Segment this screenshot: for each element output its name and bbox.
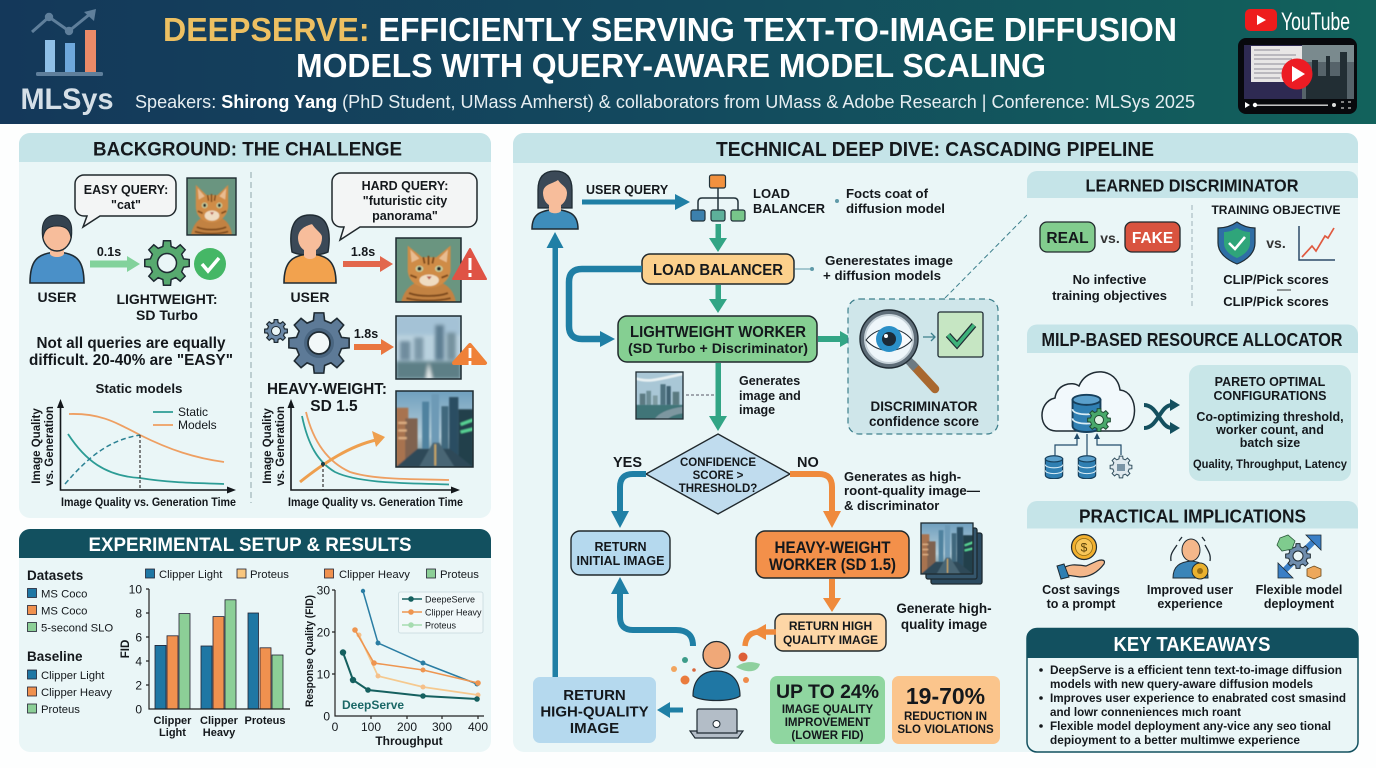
- bar chart: FID: Clipper: [154, 715, 192, 727]
- annotation: facts: Focts coat of: [846, 186, 929, 201]
- speech bubble: hard query: "futuristic city: [363, 194, 447, 208]
- label: cost savings: [1042, 583, 1120, 611]
- icon: check: [194, 248, 226, 280]
- annotation: generates image and image: image and: [739, 389, 801, 403]
- box: return high-quality image: HIGH-QUALITY: [540, 704, 649, 720]
- bar chart: FID: 4: [135, 654, 142, 668]
- annotation: generates image: + diffusion models: [823, 268, 941, 283]
- line chart: response quality vs throughput: 0: [323, 710, 330, 724]
- legend: datasets and baseline: 5-second SLO: [41, 622, 113, 634]
- training objective: TRAINING OBJECTIVE: [1212, 203, 1340, 217]
- arrow: user to return initial: [611, 577, 693, 646]
- icon: load balancer tree: [691, 175, 745, 221]
- bar chart: FID: FID: [120, 640, 132, 658]
- box: return high quality image: QUALITY IMAGE: [783, 633, 878, 647]
- line chart: response quality vs throughput: Proteus: [425, 620, 457, 630]
- chart: static models: Image Quality: [31, 408, 43, 484]
- image: cat: [187, 178, 236, 235]
- title: [163, 11, 1177, 84]
- speech bubble: hard query: panorama": [372, 209, 438, 223]
- label: cost savings: to a prompt: [1047, 597, 1116, 611]
- takeaway bullets: and lowr conneniences mıch roant: [1050, 707, 1241, 719]
- arrow: balancer to worker: [709, 285, 727, 313]
- video thumbnail: [1238, 38, 1357, 114]
- annotation: facts: [835, 186, 945, 216]
- annotation: generate high-quality: [896, 601, 992, 632]
- bar chart: FID: 6: [135, 630, 142, 644]
- box: load balancer: [642, 254, 794, 284]
- line chart: response quality vs throughput: 10: [317, 668, 330, 682]
- line chart: response quality vs throughput: 200: [397, 720, 417, 734]
- line chart: response quality vs throughput: 30: [317, 584, 330, 598]
- icon: trend chart: [1299, 226, 1335, 260]
- speech bubble: hard query: HARD QUERY:: [362, 179, 448, 193]
- panel: key takeaways: [1026, 628, 1358, 752]
- heading: key takeaways: KEY TAKEAWAYS: [1114, 634, 1270, 656]
- heading: technical deep dive: TECHNICAL DEEP DIVE: CASCADING PIPELINE: [716, 139, 1154, 161]
- box: return high-quality image: RETURN: [563, 687, 626, 704]
- arrow: return high to user: [745, 624, 776, 646]
- chart: heavy-weight curves: Image Quality: [262, 408, 274, 484]
- label: lightweight: LIGHTWEIGHT:: [116, 291, 218, 307]
- stat: up to 24%: [770, 676, 885, 744]
- line chart: response quality vs throughput: 300: [432, 720, 452, 734]
- arrow: 1.8s to cat image: 1.8s: [351, 245, 375, 259]
- speakers line: Speakers: Shirong Yang (PhD Student, UMass Amherst) & collaborators from UMass & Adobe Research | Conference: MLSys 2025: [135, 91, 1195, 112]
- chart legends: [146, 569, 479, 581]
- stat: up to 24%: UP TO 24%: [776, 682, 879, 703]
- takeaway bullets: models with new query-aware diffusion models: [1050, 679, 1313, 691]
- icon: shuffle arrows: [1144, 399, 1180, 434]
- label: load balancer: [753, 186, 826, 216]
- bar chart: FID: 8: [135, 606, 142, 620]
- legend: datasets and baseline: MS Coco: [41, 588, 87, 600]
- annotation: generates high quality: Generates as high-: [844, 469, 961, 484]
- bar chart: FID: Light: [159, 727, 186, 739]
- box: return initial image: INITIAL IMAGE: [577, 554, 664, 568]
- box: pareto configurations: CONFIGURATIONS: [1214, 389, 1326, 403]
- arrow: heavy to return high: [823, 579, 841, 612]
- bar chart: FID: 2: [135, 678, 142, 692]
- label: lightweight: SD Turbo: [136, 307, 198, 323]
- icon: user top: [532, 171, 578, 229]
- chart: heavy-weight curves: [262, 399, 463, 509]
- annotation: generates high quality: & discriminator: [844, 498, 939, 513]
- title: DEEPSERVE: EFFICIENTLY SERVING TEXT-TO-IMAGE DIFFUSION: [163, 11, 1177, 48]
- box: discriminator: confidence score: [869, 414, 979, 429]
- legend: datasets and baseline: [27, 568, 113, 716]
- box: lightweight worker: (SD Turbo + Discriminator): [628, 340, 808, 356]
- panel: MILP allocator: [1027, 324, 1358, 491]
- chart legends: Proteus: [250, 569, 289, 581]
- legend: datasets and baseline: Datasets: [27, 568, 83, 583]
- chart legends: Proteus: [440, 569, 479, 581]
- icon: cost savings: $: [1081, 540, 1088, 554]
- arrow: yes branch: YES: [613, 455, 642, 471]
- panel: background the challenge: [19, 133, 491, 518]
- header banner: [0, 0, 1376, 124]
- icon: improved user experience: [1171, 537, 1210, 579]
- heading: background: BACKGROUND: THE CHALLENGE: [93, 138, 402, 160]
- decision diamond: [646, 434, 790, 514]
- box: heavy-weight worker: [756, 531, 909, 578]
- box: pareto configurations: batch size: [1240, 436, 1300, 450]
- chart legends: Clipper Heavy: [339, 569, 410, 581]
- speech bubble: hard query: [332, 173, 477, 240]
- takeaway bullets: Flexible model deployment any-vice any seo tional: [1050, 721, 1331, 733]
- real vs fake: REAL: [1046, 230, 1089, 247]
- arrow: return to user loop: [546, 232, 564, 677]
- bar chart: FID: 10: [129, 582, 142, 596]
- annotation: generates high quality: [844, 469, 980, 513]
- decision diamond: SCORE >: [693, 470, 744, 482]
- real vs fake: vs.: [1100, 230, 1120, 246]
- image: sharp city: [396, 391, 473, 467]
- icon: lightweight gear: [145, 241, 189, 285]
- arrow: tree to load balancer: [709, 224, 727, 252]
- label: improved user experience: experience: [1157, 597, 1223, 611]
- decision diamond: THRESHOLD?: [679, 483, 757, 495]
- box: return initial image: RETURN: [594, 540, 647, 554]
- box: load balancer: LOAD BALANCER: [653, 262, 783, 279]
- label: load balancer: LOAD: [753, 186, 790, 201]
- annotation: generate high-quality: quality image: [901, 617, 988, 632]
- line chart: response quality vs throughput: [304, 584, 488, 748]
- icon: flexible deployment: [1277, 535, 1321, 579]
- annotation: generates image and image: Generates: [739, 374, 800, 388]
- title: MODELS WITH QUERY-AWARE MODEL SCALING: [296, 47, 1046, 84]
- icon: red warning: [453, 249, 486, 279]
- MLSys logo: MLSys: [20, 83, 114, 116]
- heading: experimental: EXPERIMENTAL SETUP & RESULTS: [88, 534, 412, 556]
- takeaway bullets: depioyment to a better multimwe experience: [1050, 735, 1300, 747]
- icon: shield: [1218, 222, 1255, 264]
- panel: learned discriminator: [1027, 171, 1358, 316]
- box: pareto configurations: worker count, and: [1215, 423, 1324, 437]
- clip scores: CLIP/Pick scores: [1223, 272, 1329, 287]
- line chart: response quality vs throughput: Clipper Heavy: [425, 608, 482, 618]
- speech bubble: easy query: [75, 175, 176, 227]
- box: pareto configurations: Co-optimizing threshold,: [1196, 410, 1344, 424]
- clip scores: CLIP/Pick scores: [1223, 294, 1329, 309]
- label: load balancer: BALANCER: [753, 201, 826, 216]
- icon: user at laptop: [671, 642, 760, 738]
- legend: datasets and baseline: Clipper Light: [41, 670, 105, 682]
- heading: learned discriminator: LEARNED DISCRIMINATOR: [1086, 176, 1299, 196]
- box: pareto configurations: PARETO OPTIMAL: [1215, 375, 1326, 389]
- bar chart: FID: Proteus: [245, 715, 285, 727]
- line chart: response quality vs throughput: 100: [361, 720, 381, 734]
- annotation: generates high quality: roont-quality image—: [844, 483, 980, 498]
- label: improved user experience: Improved user: [1147, 583, 1233, 597]
- decision diamond: CONFIDENCE: [680, 457, 756, 469]
- connector: discriminator to learned discriminator: [945, 215, 1027, 298]
- text: not all queries: Not all queries are equally: [36, 335, 226, 352]
- real vs fake: FAKE: [1132, 230, 1173, 247]
- bar chart: FID: [120, 582, 290, 739]
- icon: cloud with databases: [1042, 372, 1135, 479]
- icon: orange warning: [454, 345, 485, 365]
- image: generated road city: [636, 372, 683, 419]
- heading: practical implications: PRACTICAL IMPLICATIONS: [1079, 506, 1306, 526]
- icon: cost savings: [1057, 534, 1105, 579]
- takeaway bullets: [1039, 665, 1346, 747]
- bar chart: FID: Heavy: [203, 727, 236, 739]
- arrow: 1.8s to cat image: [343, 245, 393, 272]
- legend: datasets and baseline: Proteus: [41, 704, 80, 716]
- takeaway bullets: DeepServe is a efficient tenn text-to-image diffusion: [1050, 665, 1342, 677]
- box: pareto configurations: [1189, 365, 1351, 481]
- box: return high-quality image: IMAGE: [570, 720, 619, 737]
- icon: magnifier with eye: [860, 310, 935, 389]
- box: heavy-weight worker: HEAVY-WEIGHT: [774, 539, 890, 557]
- annotation: facts: diffusion model: [846, 201, 945, 216]
- panel: technical deep dive: [513, 133, 1358, 752]
- chart: heavy-weight curves: Image Quality vs. Generation Time: [288, 495, 463, 509]
- label: flexible deployment: Flexible model: [1256, 583, 1342, 597]
- real vs fake: [1040, 222, 1180, 252]
- speech bubble: easy query: "cat": [111, 198, 141, 212]
- icon: female user: USER: [291, 289, 329, 305]
- text: not all queries: difficult. 20-40% are "EASY": [29, 352, 233, 369]
- label: cost savings: Cost savings: [1042, 583, 1120, 597]
- arrow: no branch: NO: [797, 455, 819, 471]
- arrow: user query: USER QUERY: [586, 183, 669, 197]
- icon: male user: USER: [38, 289, 76, 305]
- chart: static models: Image Quality vs. Generation Time: [61, 495, 236, 509]
- chart: heavy-weight curves: vs. Generation: [275, 406, 287, 486]
- clip scores: [1223, 272, 1329, 309]
- legend: datasets and baseline: MS Coco: [41, 606, 87, 618]
- arrow: 0.1s to lightweight: [90, 245, 140, 272]
- arrow: worker to discriminator: [818, 331, 854, 347]
- line chart: response quality vs throughput: DeepeServe: [425, 594, 475, 604]
- annotation: generates image: Generestates image: [825, 253, 953, 268]
- stat: up to 24%: IMAGE QUALITY: [782, 704, 874, 716]
- panel: practical implications: [1027, 501, 1358, 618]
- stat: 19-70%: SLO VIOLATIONS: [897, 724, 994, 736]
- line chart: response quality vs throughput: Response Quality (FID): [304, 595, 316, 707]
- chart: static models: vs. Generation: [44, 406, 56, 486]
- annotation: generates image and image: image: [739, 403, 775, 417]
- arrow: 1.8s to blurred city: 1.8s: [354, 327, 378, 341]
- arrow: 0.1s to lightweight: 0.1s: [97, 245, 121, 259]
- icon: male user: [30, 215, 84, 305]
- stat: 19-70%: 19-70%: [906, 683, 985, 709]
- stat: 19-70%: [892, 676, 1000, 744]
- arrow: user to return high-quality image: [657, 702, 683, 718]
- icon: checkmark card: [923, 312, 983, 357]
- panel: experimental setup and results: [19, 529, 491, 752]
- label: flexible deployment: deployment: [1264, 597, 1335, 611]
- chart: static models: [31, 381, 236, 509]
- box: pareto configurations: Quality, Throughput, Latency: [1193, 459, 1348, 471]
- stat: up to 24%: IMPROVEMENT: [785, 717, 870, 729]
- box: heavy-weight worker: WORKER (SD 1.5): [769, 556, 896, 574]
- label: lightweight: [116, 291, 218, 323]
- bar chart: FID: Clipper: [200, 715, 239, 727]
- image: hard query cat result: [396, 238, 461, 302]
- text: no infective: training objectives: [1052, 288, 1167, 303]
- MLSys logo: [20, 9, 114, 116]
- box: return high-quality image: [533, 677, 656, 743]
- icon: female user: [284, 215, 336, 305]
- takeaway bullets: Improves user experience to enabrated cost smasind: [1050, 693, 1346, 705]
- chart: static models: Models: [178, 418, 217, 432]
- label: heavy-weight: SD 1.5: [310, 398, 358, 415]
- box: lightweight worker: LIGHTWEIGHT WORKER: [630, 324, 806, 341]
- line chart: response quality vs throughput: DeepServe: [342, 698, 404, 712]
- annotation: generates image: [795, 253, 953, 283]
- label: heavy-weight: HEAVY-WEIGHT:: [267, 381, 387, 398]
- annotation: generate high-quality: Generate high-: [896, 601, 992, 616]
- line chart: response quality vs throughput: 20: [317, 626, 330, 640]
- line chart: response quality vs throughput: Throughput: [375, 734, 443, 748]
- box: return initial image: [571, 531, 670, 575]
- legend: datasets and baseline: Baseline: [27, 649, 83, 664]
- line chart: response quality vs throughput: 0: [332, 720, 339, 734]
- box: discriminator: DISCRIMINATOR: [870, 399, 978, 414]
- stat: up to 24%: (LOWER FID): [791, 730, 864, 742]
- text: not all queries: [29, 335, 233, 369]
- training objective: vs.: [1266, 235, 1286, 251]
- box: return high quality image: [775, 614, 886, 651]
- icon: heavy-weight gears: [265, 313, 349, 373]
- text: no infective: No infective: [1073, 272, 1146, 287]
- arrow: balancer loop to worker: [569, 269, 642, 347]
- image: blurred city: [396, 316, 461, 379]
- box: return high quality image: RETURN HIGH: [789, 619, 872, 633]
- image: stacked city outputs: [921, 523, 982, 584]
- heading: MILP: MILP-BASED RESOURCE ALLOCATOR: [1042, 330, 1342, 350]
- annotation: generates image and image: [739, 374, 801, 417]
- text: no infective: [1052, 272, 1167, 303]
- line chart: response quality vs throughput: 400: [468, 720, 488, 734]
- chart: static models: Static models: [96, 381, 182, 396]
- chart: static models: Static: [178, 405, 208, 419]
- label: heavy-weight: [267, 381, 387, 415]
- bar chart: FID: 0: [135, 702, 142, 716]
- box: discriminator: [848, 299, 998, 434]
- box: lightweight worker: [618, 316, 817, 362]
- training objective: [1212, 203, 1340, 264]
- arrow: user query: [582, 183, 690, 210]
- legend: datasets and baseline: Clipper Heavy: [41, 687, 112, 699]
- arrow: yes branch: [611, 455, 646, 528]
- chart legends: Clipper Light: [159, 569, 223, 581]
- speech bubble: easy query: EASY QUERY:: [84, 183, 168, 197]
- arrow: no branch: [790, 455, 841, 528]
- YouTube logo: [1245, 8, 1350, 36]
- label: flexible deployment: [1256, 583, 1342, 611]
- arrow: 1.8s to blurred city: [354, 327, 394, 355]
- label: improved user experience: [1147, 583, 1233, 611]
- stat: 19-70%: REDUCTION IN: [904, 711, 987, 723]
- arrow: worker to decision: [686, 363, 727, 431]
